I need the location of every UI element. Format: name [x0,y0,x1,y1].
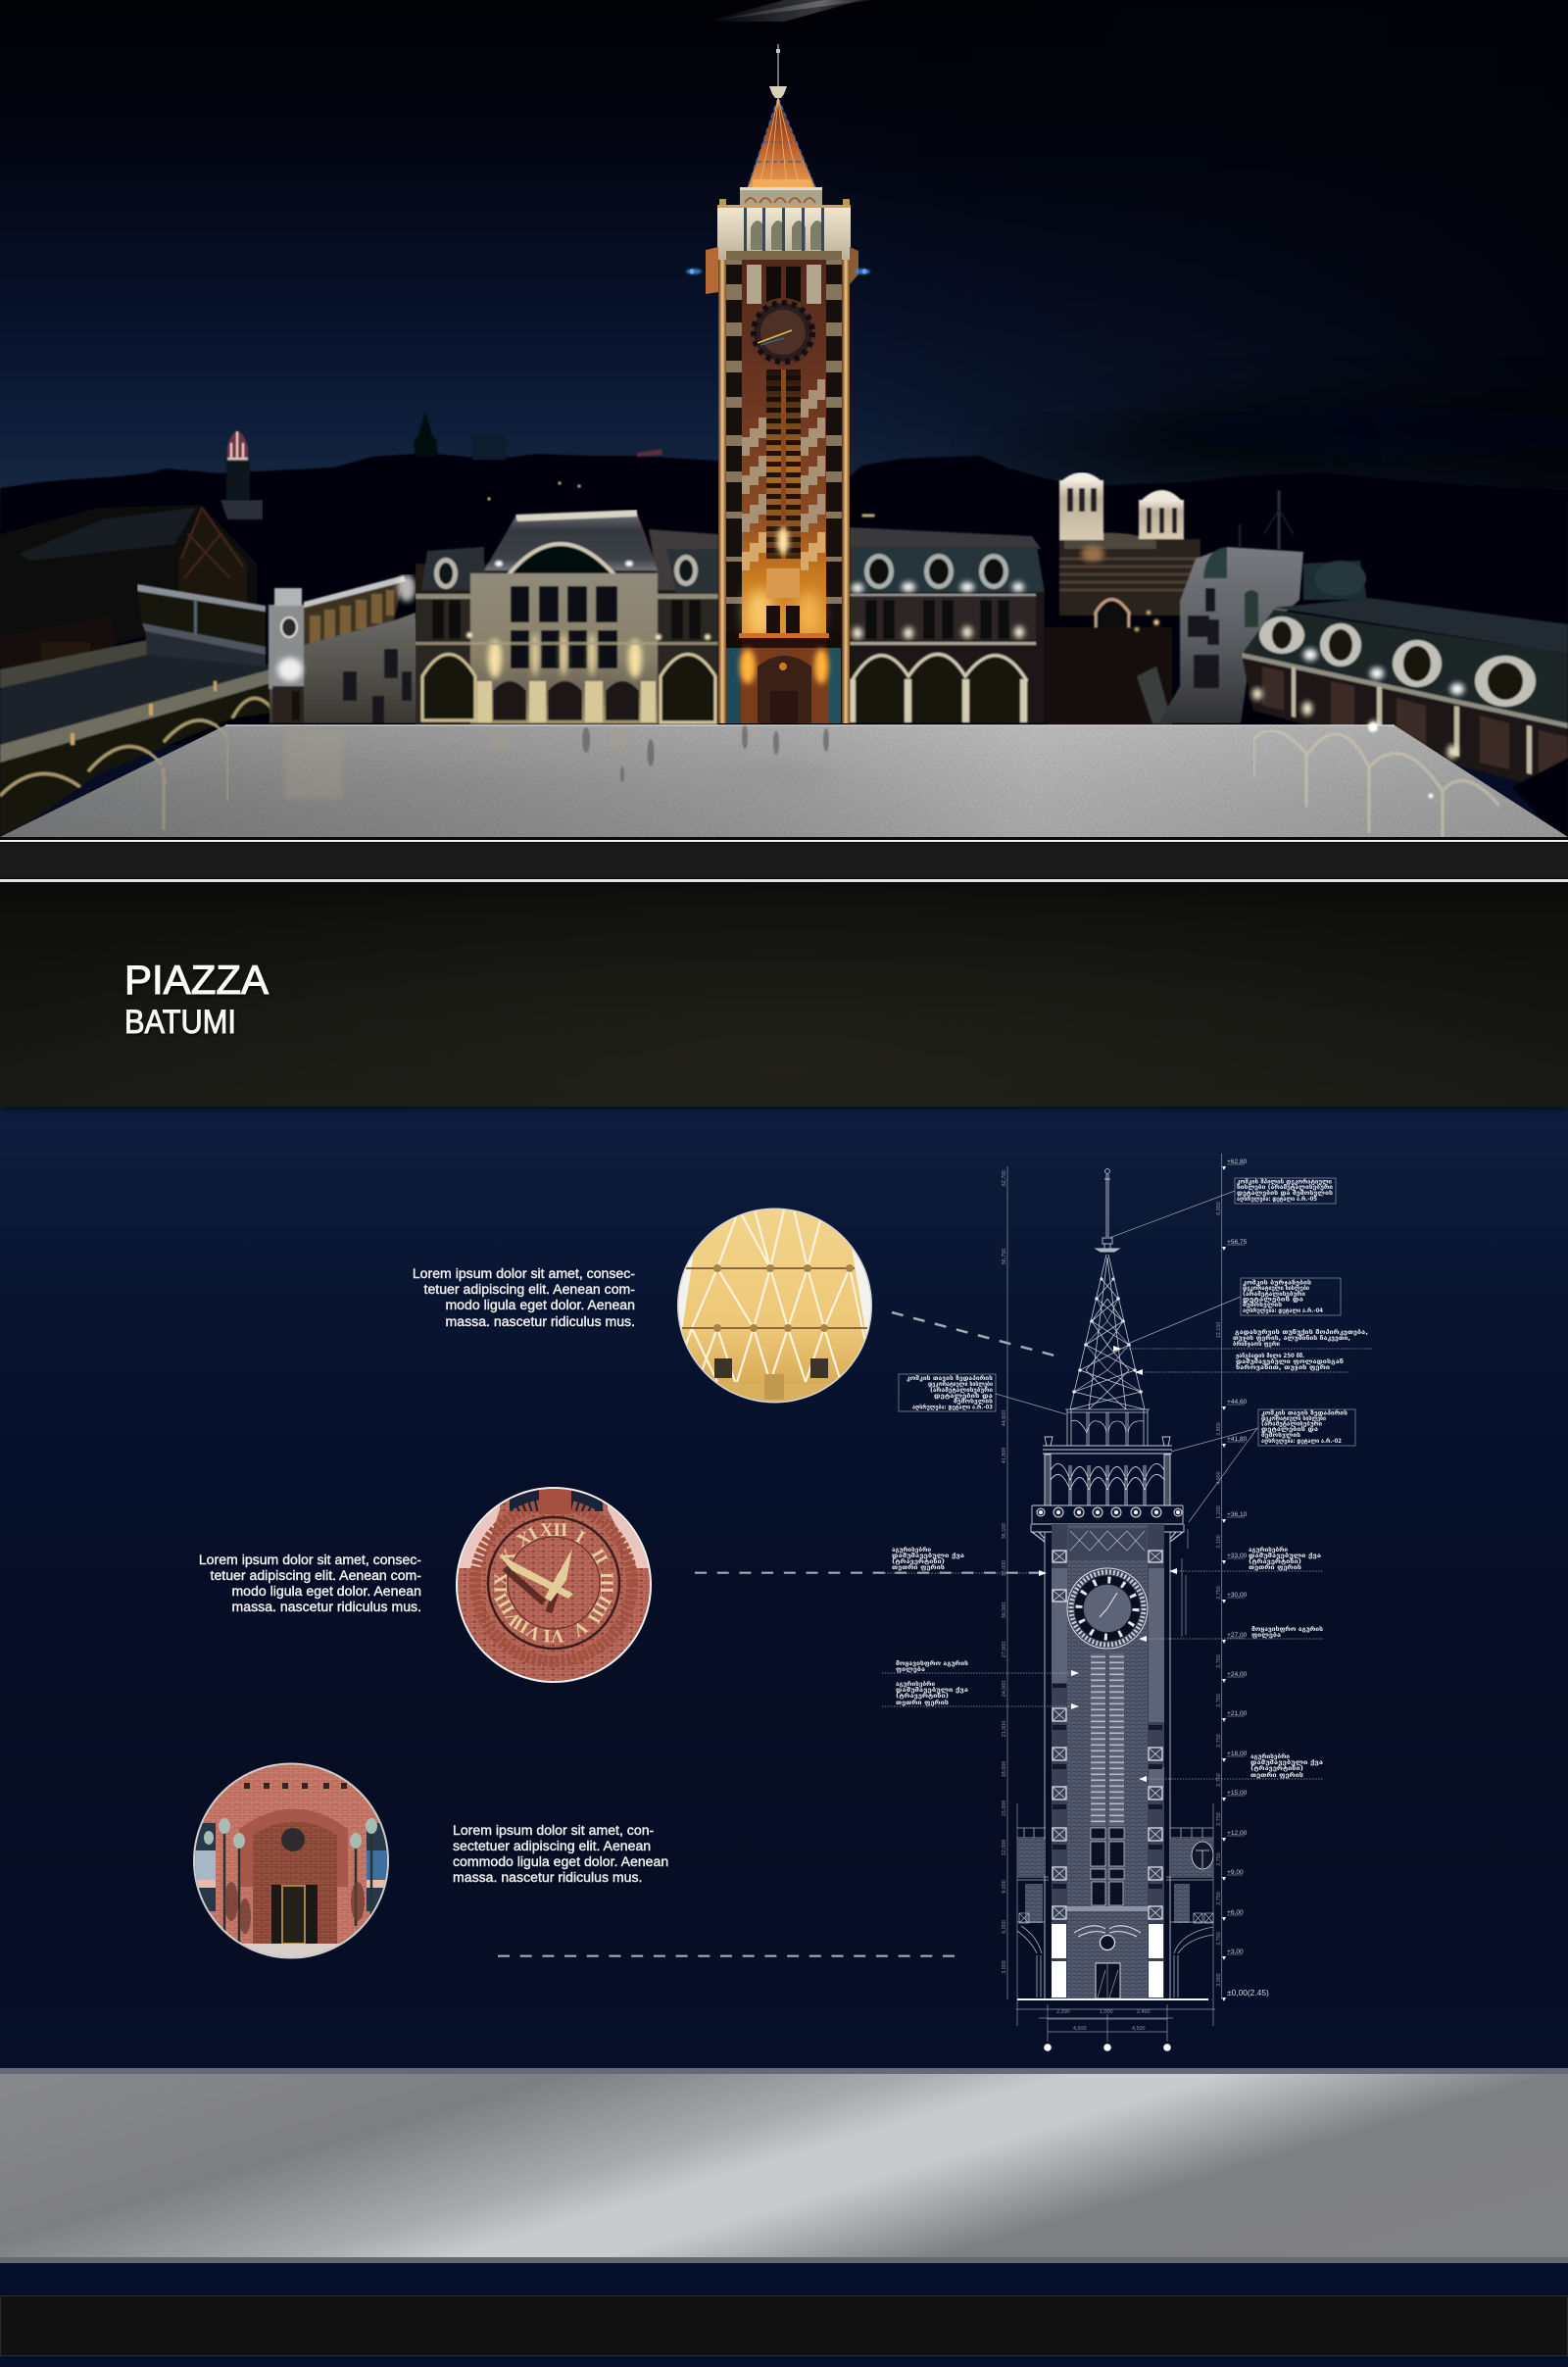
text block: clock description: tetuer adipiscing elit. Aenean com- [211,1567,421,1583]
note: right decorative brick: დამუშავებული ქვა [1249,1553,1322,1559]
clock numerals: VI [543,1625,564,1646]
elevation markers: +6,00 [1227,1909,1244,1916]
leader lines [882,1191,1372,1779]
callout: belfry note: დეკორატიული ხისლები [1261,1415,1327,1422]
ground floor and entrance [1017,1924,1208,2000]
left terrace and arcade [0,627,275,843]
note: right decorative brick: აგურისებრი [1249,1547,1289,1553]
left dimension values: 3,000 [1216,1973,1222,1987]
callout: spire mast note: კოშკის შპილის დეკორატიული [1237,1178,1333,1186]
spire lattice pyramid [1070,1255,1145,1409]
left dimension values [1002,1170,1222,2032]
callout: spire body note: აღსრულება: დეტალი ა.რ.-04 [1243,1307,1323,1314]
tower clock face [749,298,817,367]
tower balcony and entrance [726,633,841,723]
note: left decorative brick: თეთრი ფერის [892,1564,946,1571]
tower central striped windows [766,370,801,559]
left dimension values: 2,750 [1216,1812,1222,1826]
reflected facade lights [284,730,627,799]
balustrade with rosettes [1031,1505,1184,1542]
note: left brick colour: ფილება [896,1666,926,1673]
text block: entrance description: sectetuer adipiscing elit. Aenean [453,1838,651,1853]
tower zigzag cream brick pattern [742,379,825,570]
reflected arches on right [1253,730,1499,839]
note: left decorative brick: აგურისებრი [892,1547,932,1553]
text block: spire description: Lorem ipsum dolor sit amet, consec- [413,1265,635,1281]
note: left lower stone: აგურისებრი [896,1681,936,1688]
distant church with two lit towers [1045,472,1200,725]
circle photo: brick entrance [193,1762,389,1958]
clock numerals: II [587,1546,612,1568]
note: left decorative brick: (ტრავერტინი) [892,1558,945,1565]
note: right lower stone: აგურისებრი [1250,1753,1291,1760]
callout: belfry note: შემოსვლის [1261,1432,1301,1439]
left dimension values: 21,000 [1002,1721,1007,1737]
elevation markers [1222,1159,1269,2001]
clock numerals [494,1523,613,1643]
left dimension values: 2,800 [1216,1422,1222,1436]
right white building [1158,490,1367,723]
tower shaft [718,260,850,723]
callout: spire body note: კოშკის ბურჯანების [1243,1280,1312,1286]
left old buildings [0,500,263,686]
left dimension values: 1,200 [1216,1505,1222,1519]
left dimension values: 12,000 [1002,1840,1007,1855]
note: right decorative brick: თეთრი ფერის [1249,1564,1302,1571]
note: left lower stone: (ტრავერტინი) [896,1693,949,1700]
tower antenna and cap [769,44,787,98]
callout: lantern note: შემოსვლის [954,1398,994,1405]
note: left lower stone: დამუშავებული ქვა [896,1687,969,1694]
elevation markers: +9,00 [1227,1869,1244,1876]
side window crosses [1053,1551,1162,1919]
white wing with corner turret [137,574,428,723]
note: right lower stone: თეთრი ფერის [1250,1772,1304,1779]
elevation markers: +41,80 [1227,1436,1248,1443]
right foreground building [1242,598,1568,839]
text block: entrance description: massa. nascetur ridiculus mus. [453,1869,642,1885]
strip between the photo and the header [0,837,1568,882]
panel: night photo of the piazza and clock tower [0,0,1568,837]
elevation markers: +27,00 [1227,1632,1248,1639]
callout: spire body note: დეკორატიული ხისლები [1243,1285,1310,1292]
left dimension values: 18,000 [1002,1761,1007,1777]
clock numerals: VIII [491,1589,526,1630]
text block: entrance description: commodo ligula eget dolor. Aenean [453,1853,668,1869]
night sky [0,0,1568,500]
callout: spire mast note: აღსრულება: დეტალი ა.რ.-05 [1237,1196,1317,1203]
leader arrowheads [1039,1346,1177,1782]
left dimension values: 2,750 [1216,1694,1222,1707]
callout: lantern note: (არამეტალისებური [930,1387,994,1394]
left dimension values: 27,000 [1002,1642,1007,1657]
elevation markers: +15,00 [1227,1790,1248,1797]
clock numerals: V [568,1616,591,1641]
clock numerals: VII [511,1612,545,1645]
elevation markers: +62,80 [1227,1159,1248,1165]
note: left brick colour: მოყავისფრო აგურის [896,1660,969,1667]
left dimension values: 24,000 [1002,1681,1007,1697]
elevation markers: +21,00 [1227,1710,1248,1717]
elevation markers: +3,00 [1227,1948,1244,1955]
note: right lower stone: (ტრავერტინი) [1250,1765,1303,1772]
tower balconies and side lights [686,247,870,294]
reflected arches on left [155,727,228,830]
text block: entrance description: Lorem ipsum dolor sit amet, con- [453,1822,654,1838]
axis bubbles [1044,2044,1171,2051]
panel: navy blueprint section background [0,1107,1568,2068]
left dimension values: 41,800 [1002,1448,1007,1463]
left dimension values: 2,750 [1216,1892,1222,1905]
chart: architectural elevation drawing of the tower [882,1154,1372,2051]
elevation markers: +18,00 [1227,1751,1248,1757]
elevation markers: +24,00 [1227,1671,1248,1678]
left dimension values: 12,150 [1216,1322,1222,1338]
callout: spire body note: დეტალების და [1243,1296,1304,1304]
callout: lantern note: დეტალების და [934,1393,994,1400]
clock numerals: IIII [583,1592,615,1627]
elevation markers: +30,00 [1227,1592,1248,1599]
callout: spire mast note: დეტალების და შემოსვლის [1237,1190,1334,1197]
right side wing [1166,1828,1213,1997]
clock hand shadows [505,1568,564,1612]
left dimension values: 62,700 [1002,1170,1007,1186]
left dimension values: 4,500 [1132,2026,1145,2032]
callout: spire body note [1241,1278,1341,1315]
tower spire [748,98,815,187]
left dimension values: 2,750 [1216,1932,1222,1946]
left dimension values: 6,050 [1216,1202,1222,1215]
elevation markers: +36,10 [1227,1511,1248,1518]
left dimension values: 2,750 [1216,1734,1222,1748]
text block: clock description: Lorem ipsum dolor sit amet, consec- [199,1552,421,1567]
clock on the drawing [1067,1568,1148,1649]
tower lantern [740,187,822,205]
tower belfry [717,199,851,260]
note: right brick colour: ფილება [1251,1632,1282,1639]
distant skyline silhouette [0,412,1568,745]
left dimension values: 56,750 [1002,1249,1007,1264]
central striped windows [1091,1653,1105,1826]
text block: entrance description [453,1822,668,1885]
left dimension values: 3,000 [1002,1960,1007,1974]
callout: belfry note: (არამეტალისებური [1261,1421,1323,1427]
left dimension values: 15,000 [1002,1800,1007,1816]
left side wing [1017,1828,1049,1997]
text block: spire description [413,1265,635,1329]
reflective floor plane [0,720,1568,839]
left dimension values: 2,750 [1216,1773,1222,1787]
arrow: dashed connector from clock photo [695,1572,1039,1574]
note: right brick colour: მოყავისფრო აგურის [1251,1626,1324,1633]
clock numerals: I [571,1527,588,1549]
clock numerals: XI [514,1523,542,1552]
text block: spire description: modo ligula eget dolor. Aenean [445,1297,635,1312]
left dimension values: 36,100 [1002,1523,1007,1539]
elevation markers: +12,00 [1227,1830,1248,1837]
note: right decorative brick: (ტრავერტინი) [1249,1558,1301,1565]
callout: spire mast note [1235,1178,1336,1204]
note: spire steel: ჟანგბადის მილი 250 მმ. [1236,1353,1304,1359]
note: spire cladding: ბრინჯაოს ფერი [1233,1341,1281,1348]
callout: spire body note: შემოსვლის [1243,1302,1283,1308]
panel: silver light band [0,2068,1568,2263]
left dimension values: 44,600 [1002,1410,1007,1426]
central left building with pavilion [416,510,718,725]
clock numerals: XII [540,1520,567,1541]
circle photo: spire lattice [677,1208,872,1404]
note: spire cladding: გადახურვის თუნუქის მოპირკეთება, [1235,1329,1368,1336]
elevation markers: ±0,00(2.45) [1227,1988,1269,1997]
reflected people [582,725,829,782]
clock numerals: III [596,1572,616,1594]
title: PIAZZA: PIAZZA [124,957,269,1002]
note: right lower stone: დამუშავებული ქვა [1250,1759,1324,1766]
callout: belfry note: კოშკის თავის ზედაპირის [1261,1409,1348,1417]
panel: dark title band [0,882,1568,1107]
callout: spire mast note: ხისლები (არამეტალისებური [1237,1184,1334,1191]
callout: lantern note [899,1374,996,1411]
circle photo: brick clock face [456,1487,652,1683]
callout: belfry note: დეტალების და [1261,1426,1319,1433]
spire mast [1096,1169,1119,1252]
callout: lantern note: აღსრულება: დეტალი ა.რ.-03 [912,1404,993,1411]
clock tower [686,44,870,723]
clock hands [498,1549,573,1602]
elevation markers: +44,60 [1227,1399,1248,1405]
elevation markers: +33,00 [1227,1553,1248,1559]
note: left lower stone: თეთრი ფერის [896,1700,950,1706]
note: spire steel: ხაროვანით, თუჯის ფერი [1236,1364,1331,1371]
arrow: dashed connector from entrance photo [498,1954,955,1957]
left dimension values: 33,000 [1002,1560,1007,1576]
glow on lower tower [746,568,820,636]
left dimension values: 2,750 [1216,1654,1222,1668]
lantern storey [1065,1409,1150,1446]
note: left decorative brick: დამუშავებული ქვა [892,1553,965,1559]
left dimension values: 2,450 [1137,2009,1151,2015]
text block: clock description [199,1552,421,1614]
tower shaft [1045,1524,1170,1999]
left dimension values: 2,750 [1216,1586,1222,1600]
callout: lantern note: კოშკის თავის ზედაპირის [906,1375,994,1382]
dimension axes [1007,1154,1222,2042]
note: spire cladding: თუჯის ფერის, ალუმინის ნაკვეთი, [1233,1335,1350,1342]
subtitle: BATUMI: BATUMI [124,1004,236,1041]
left dimension values: 30,000 [1002,1603,1007,1618]
callout: belfry note: აღსრულება: დეტალი ა.რ.-02 [1261,1438,1342,1445]
text block: spire description: tetuer adipiscing elit. Aenean com- [424,1281,635,1297]
text block: spire description: massa. nascetur ridiculus mus. [446,1313,635,1329]
clock numerals: IX [491,1572,512,1594]
left dimension values: 9,000 [1002,1880,1007,1894]
clock numerals: X [496,1546,520,1567]
text block: clock description: modo ligula eget dolor. Aenean [231,1583,421,1599]
text block: clock description: massa. nascetur ridiculus mus. [232,1599,421,1614]
left dimension values: 6,000 [1002,1920,1007,1934]
panel: dark footer band [0,2263,1568,2367]
left dimension values: 4,500 [1073,2026,1086,2032]
note: spire steel: დამუშავებული ფოლადისგან [1236,1358,1345,1365]
arrow: dashed connector from spire photo [892,1311,1054,1356]
callout: belfry note [1258,1409,1355,1446]
callout: lantern note: დეკორატიული ხისლები [928,1381,994,1388]
left dimension values: 2,200 [1056,2009,1070,2015]
belfry storey [1043,1437,1172,1505]
left dimension values: 1,000 [1100,2009,1113,2015]
callout: spire body note: (არამეტალისებური [1243,1291,1306,1298]
central right building [850,527,1045,723]
elevation markers: +56,75 [1227,1239,1248,1246]
left dimension values: 2,750 [1216,1852,1222,1866]
left dimension values: 3,100 [1216,1535,1222,1549]
left dimension values: 4,900 [1216,1471,1222,1485]
